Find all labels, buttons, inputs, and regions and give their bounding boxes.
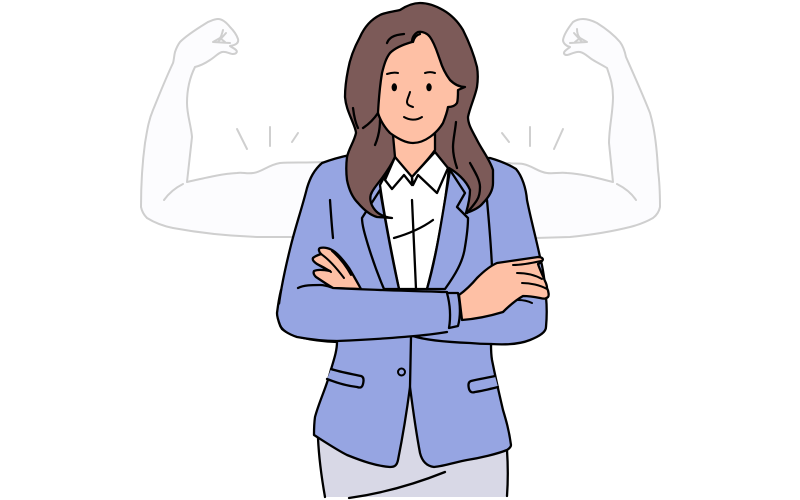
pocket right (468, 376, 498, 392)
pocket left (327, 369, 364, 388)
nose (407, 92, 413, 107)
left eye (392, 83, 397, 91)
jacket button (398, 368, 405, 376)
ghost flexed arm right (502, 19, 660, 238)
lapels (362, 170, 468, 289)
face (378, 32, 465, 143)
right eye (426, 83, 432, 91)
sleeve cuff (447, 293, 460, 328)
smile (404, 117, 422, 120)
collar (385, 152, 448, 193)
front hand (459, 257, 549, 320)
jacket body (278, 155, 547, 467)
front forearm sleeve (277, 285, 449, 341)
eyebrows (387, 72, 435, 74)
hair back (345, 3, 493, 218)
ghost flexed arm left (141, 19, 322, 237)
skirt (318, 375, 508, 498)
back hand fingers (313, 248, 361, 289)
hair strands (353, 34, 480, 213)
shirt (380, 150, 449, 289)
neck (393, 130, 435, 177)
